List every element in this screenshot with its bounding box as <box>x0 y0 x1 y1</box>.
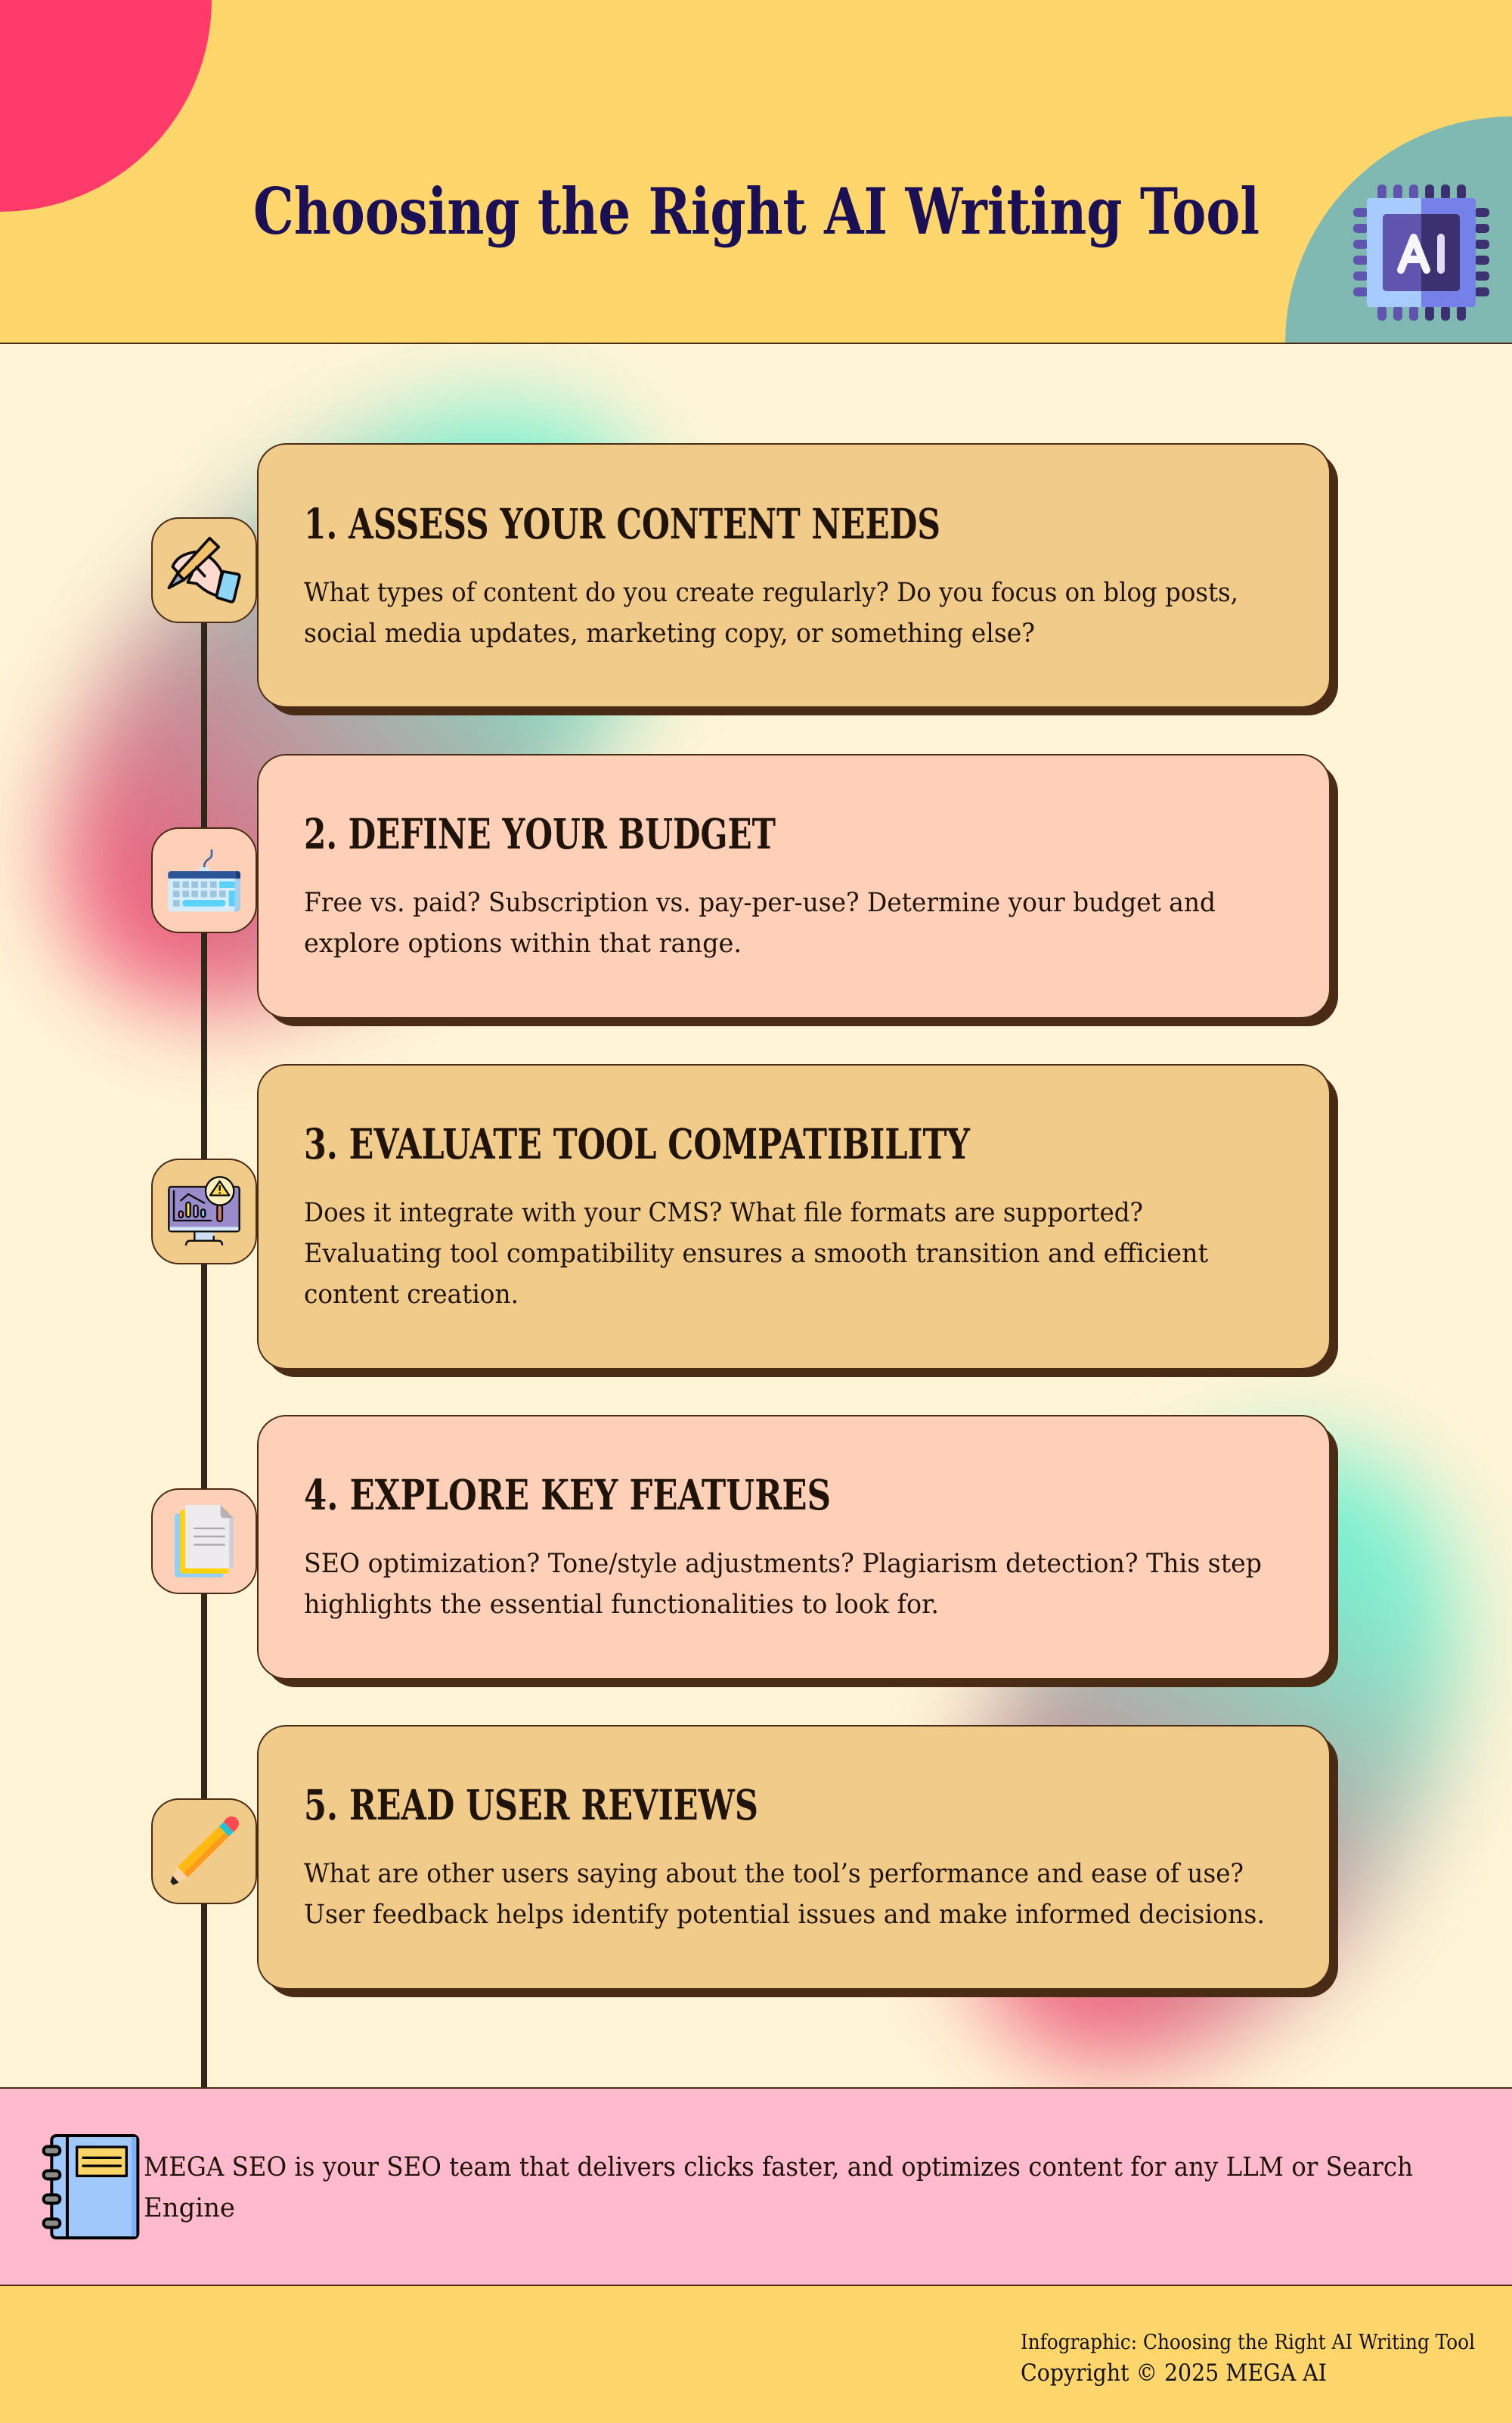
title: Choosing the Right AI Writing Tool <box>253 174 1259 249</box>
step 2 text: Free vs. paid? Subscription vs. pay-per-use? Determine your budget and <box>304 888 1216 918</box>
step 5 heading: 5. READ USER REVIEWS <box>304 1780 758 1829</box>
icon tile: keyboard <box>152 828 256 932</box>
panel: step 3 <box>258 1065 1338 1377</box>
timeline vertical line <box>201 517 207 2087</box>
header band <box>0 0 1512 344</box>
step 4 text <box>304 1549 1262 1620</box>
banner text: Engine <box>144 2193 235 2223</box>
icon: AI chip <box>1353 185 1489 321</box>
step 5 text <box>304 1859 1265 1930</box>
icon tile: pencil <box>152 1799 256 1903</box>
step 3 heading: 3. EVALUATE TOOL COMPATIBILITY <box>304 1119 971 1168</box>
footer band <box>0 2286 1512 2423</box>
step 3 text: Does it integrate with your CMS? What file formats are supported? <box>304 1198 1143 1228</box>
card background <box>258 1065 1338 1377</box>
panel: step 4 <box>258 1416 1338 1687</box>
step 4 text: SEO optimization? Tone/style adjustments? Plagiarism detection? This step <box>304 1549 1262 1579</box>
card background <box>258 1726 1338 1997</box>
copyright: Copyright © 2025 MEGA AI <box>1021 2359 1327 2387</box>
banner text <box>144 2152 1413 2223</box>
panel: step 5 <box>258 1726 1338 1997</box>
card background <box>258 1416 1338 1687</box>
step 3 text: content creation. <box>304 1280 519 1310</box>
step 5 text: User feedback helps identify potential issues and make informed decisions. <box>304 1900 1265 1930</box>
step 3 text: Evaluating tool compatibility ensures a smooth transition and efficient <box>304 1239 1208 1269</box>
pink quarter circle <box>0 0 212 212</box>
panel: step 1 <box>258 444 1338 715</box>
step 4 heading: 4. EXPLORE KEY FEATURES <box>304 1470 831 1519</box>
step 5 text: What are other users saying about the tool’s performance and ease of use? <box>304 1859 1244 1889</box>
icon tile: hand writing <box>152 518 256 622</box>
decorative blurred blob: top left <box>0 298 768 1116</box>
footer caption: Infographic: Choosing the Right AI Writing Tool <box>1021 2331 1475 2354</box>
card background <box>258 755 1338 1026</box>
step 1 heading: 1. ASSESS YOUR CONTENT NEEDS <box>304 499 940 548</box>
icon tile: documents <box>152 1489 256 1593</box>
decorative blurred blob: bottom right <box>860 1360 1512 2148</box>
step 1 text: social media updates, marketing copy, or something else? <box>304 619 1035 649</box>
panel: step 2 <box>258 755 1338 1026</box>
step 3 text <box>304 1198 1208 1310</box>
step 2 heading: 2. DEFINE YOUR BUDGET <box>304 809 776 858</box>
step 1 text <box>304 578 1238 649</box>
banner: MEGA SEO <box>0 2087 1512 2286</box>
step 2 text <box>304 888 1216 959</box>
step 1 text: What types of content do you create regularly? Do you focus on blog posts, <box>304 578 1238 608</box>
banner text: MEGA SEO is your SEO team that delivers clicks faster, and optimizes content for any LLM or Search <box>144 2152 1413 2183</box>
card background <box>258 444 1338 715</box>
icon tile: monitor with warning <box>152 1159 256 1264</box>
icon: notebook <box>44 2136 138 2238</box>
step 2 text: explore options within that range. <box>304 929 742 959</box>
step 4 text: highlights the essential functionalities to look for. <box>304 1590 939 1620</box>
teal quarter circle <box>1285 116 1512 343</box>
